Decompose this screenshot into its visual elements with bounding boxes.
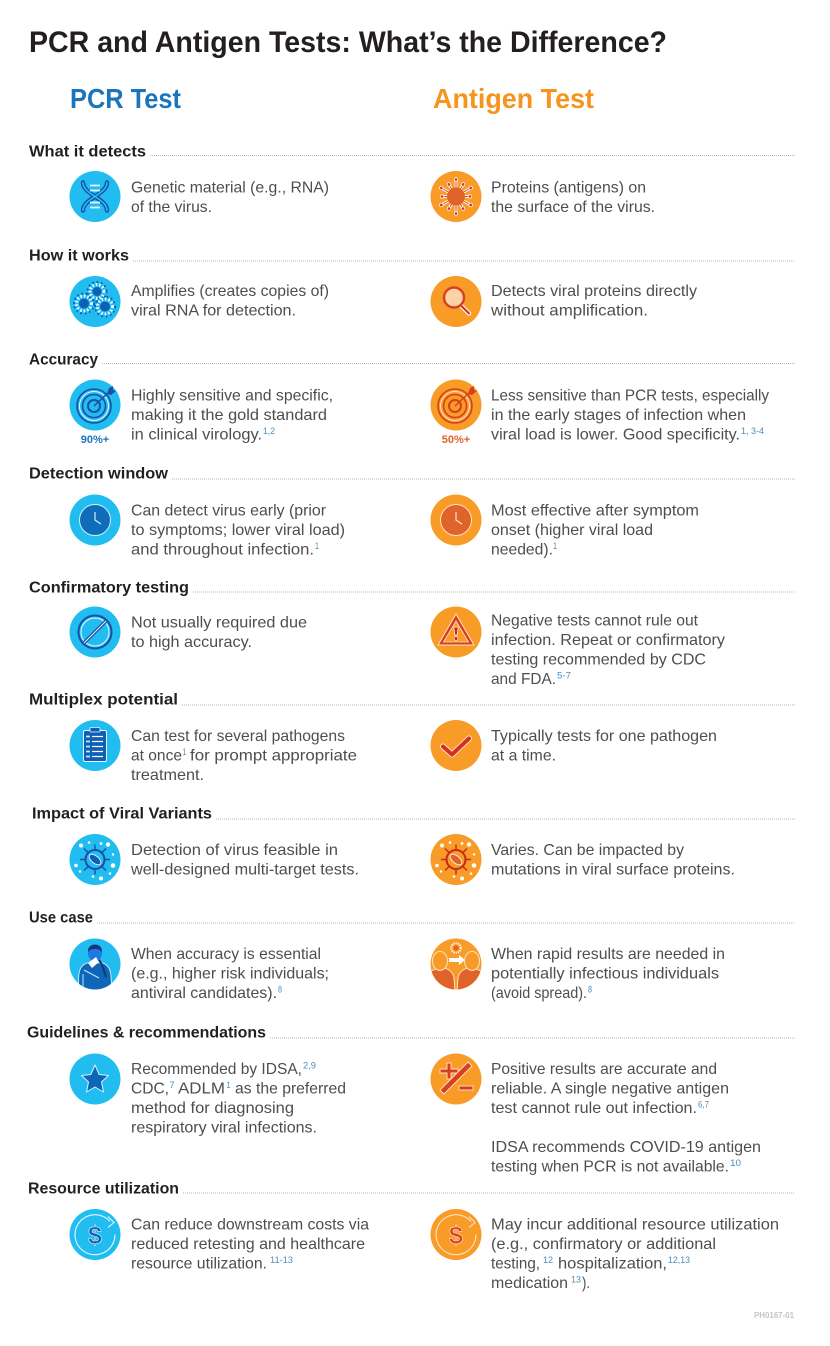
icon: clock	[430, 494, 482, 546]
Antigen cell: accuracy	[430, 380, 769, 446]
text block: IDSA recommends COVID-19 antigen	[491, 1139, 761, 1156]
Antigen cell: guidelines	[430, 1054, 761, 1176]
text block: the surface of the virus.	[491, 199, 655, 216]
PCR cell: what it detects	[70, 171, 329, 222]
icon: clipboard checklist	[70, 720, 120, 771]
text block: 12	[543, 1255, 553, 1265]
title: PCR and Antigen Tests: What’s the Difference?	[29, 26, 667, 59]
text block: 11-13	[270, 1255, 293, 1265]
PCR cell: use case	[70, 938, 329, 1002]
text block	[491, 728, 717, 764]
icon: mutating virus	[430, 834, 482, 885]
text block: (e.g., confirmatory or additional	[491, 1236, 716, 1253]
icon: clock	[70, 494, 120, 546]
text block: in the early stages of infection when	[491, 407, 746, 424]
text block: reduced retesting and healthcare	[131, 1236, 365, 1253]
icon: magnifier	[430, 276, 482, 327]
text block: When accuracy is essential	[131, 946, 321, 963]
section: Multiplex potential: Multiplex potential	[29, 692, 178, 708]
section: Accuracy: Accuracy	[29, 352, 98, 368]
text block	[131, 1216, 369, 1272]
text block: Less sensitive than PCR tests, especially	[491, 388, 769, 404]
text block	[491, 1061, 761, 1176]
text block: needed).	[491, 542, 553, 558]
text block: for prompt appropriate	[190, 748, 357, 764]
text block: Highly sensitive and specific,	[131, 388, 333, 404]
icon: plus minus	[430, 1054, 482, 1104]
text block: Recommended by IDSA,	[131, 1061, 302, 1078]
text block: antiviral candidates).	[131, 985, 277, 1002]
text block: Positive results are accurate and	[491, 1061, 717, 1078]
text block: 1	[226, 1080, 230, 1090]
Antigen cell: detection window	[430, 494, 699, 558]
text block: 6,7	[698, 1100, 709, 1110]
text block: Negative tests cannot rule out	[491, 612, 699, 630]
text block: Most effective after symptom	[491, 502, 699, 520]
text block: at a time.	[491, 748, 556, 764]
text block: 2,9	[303, 1060, 316, 1070]
icon: DNA helix	[70, 171, 120, 222]
section: Guidelines & recommendations: Guidelines & recommendations	[27, 1024, 266, 1042]
text block: Can detect virus early (prior	[131, 502, 327, 520]
text block: and FDA.	[491, 671, 556, 688]
PCR cell: resource utilization	[70, 1209, 369, 1272]
text block: mutations in viral surface proteins.	[491, 862, 735, 878]
text block: 5-7	[557, 670, 571, 680]
icon: prohibited sign	[70, 606, 120, 658]
section: Use case: Use case	[29, 910, 93, 926]
text block: ).	[582, 1275, 590, 1292]
text block: respiratory viral infections.	[131, 1120, 317, 1136]
icon: target 90%+	[70, 380, 120, 446]
text block: treatment.	[131, 767, 204, 784]
text block: to high accuracy.	[131, 634, 252, 651]
text block: testing,	[491, 1256, 540, 1272]
text block	[130, 842, 359, 878]
icon: dollar cycle	[430, 1209, 482, 1260]
text block: testing recommended by CDC	[491, 652, 706, 668]
icon: star	[70, 1054, 120, 1104]
text block: (avoid spread).	[491, 985, 587, 1002]
text block: When rapid results are needed in	[491, 946, 725, 963]
text block: 8	[588, 984, 592, 994]
section: Detection window: Detection window	[29, 466, 169, 482]
text block: ADLM	[178, 1080, 225, 1098]
text block	[131, 283, 329, 320]
text block: (e.g., higher risk individuals;	[131, 966, 329, 982]
section: Confirmatory testing: Confirmatory testing	[29, 580, 189, 596]
text block: method for diagnosing	[131, 1100, 294, 1117]
text block: to symptoms; lower viral load)	[131, 522, 345, 539]
text block: without amplification.	[490, 302, 648, 320]
heading: Antigen Test: Antigen Test	[433, 83, 594, 114]
section: Resource utilization: Resource utilization	[28, 1180, 179, 1198]
text block: of the virus.	[131, 199, 212, 216]
text block: hospitalization,	[558, 1256, 667, 1272]
PCR cell: accuracy	[70, 380, 333, 446]
text block: Detects viral proteins directly	[491, 283, 697, 300]
text block	[491, 388, 769, 444]
text block: resource utilization.	[131, 1256, 267, 1272]
text block: Typically tests for one pathogen	[491, 728, 717, 745]
text block: viral RNA for detection.	[131, 302, 296, 320]
icon: two people with virus spread	[429, 938, 483, 991]
Antigen cell: confirmatory testing	[430, 606, 725, 688]
Antigen cell: how it works	[430, 276, 697, 327]
icon: target 90%+: 90%+	[81, 434, 109, 446]
icon: target 50%+	[430, 380, 482, 446]
text block: Varies. Can be impacted by	[491, 842, 684, 859]
text block: 1	[182, 747, 186, 757]
text block	[131, 388, 333, 444]
icon: dollar cycle	[70, 1209, 120, 1260]
text block	[491, 502, 699, 558]
section: What it detects: What it detects	[29, 144, 146, 160]
text block	[491, 946, 725, 1002]
text block: well-designed multi-target tests.	[130, 862, 359, 878]
text block: 1, 3-4	[741, 426, 764, 436]
text block: Amplifies (creates copies of)	[131, 283, 329, 300]
Antigen cell: resource utilization	[430, 1209, 779, 1292]
text block: 10	[730, 1158, 741, 1168]
text block	[491, 612, 725, 688]
icon: amplified viruses	[70, 276, 120, 327]
Antigen cell: what it detects	[430, 171, 655, 222]
text block	[131, 728, 357, 784]
text block: Not usually required due	[131, 614, 307, 632]
text block: Detection of virus feasible in	[131, 842, 338, 859]
PCR cell: guidelines	[70, 1054, 346, 1136]
text block: testing when PCR is not available.	[491, 1158, 729, 1176]
text block	[131, 946, 329, 1002]
heading: PCR Test: PCR Test	[70, 83, 181, 114]
text block: at once	[131, 748, 182, 764]
text block: 12,13	[668, 1255, 690, 1265]
PCR cell: confirmatory testing	[70, 606, 307, 658]
text block: Can test for several pathogens	[131, 728, 345, 745]
icon: person with swab	[70, 938, 120, 994]
text block	[131, 1060, 346, 1136]
text block: 1	[315, 541, 319, 551]
text block	[131, 614, 307, 651]
text block: medication	[491, 1275, 568, 1292]
text block: infection. Repeat or confirmatory	[491, 632, 725, 649]
text block	[131, 502, 345, 558]
text block: test cannot rule out infection.	[491, 1100, 697, 1117]
text block: viral load is lower. Good specificity.	[491, 426, 740, 444]
text block: CDC,	[131, 1080, 169, 1098]
text block: 1	[553, 541, 557, 551]
section: Impact of Viral Variants: Impact of Viral Variants	[32, 806, 212, 822]
icon: dollar cycle: $	[449, 1222, 463, 1250]
icon: target 50%+: 50%+	[442, 434, 470, 446]
text block: onset (higher viral load	[491, 522, 653, 539]
text block: May incur additional resource utilization	[491, 1216, 779, 1234]
text block: and throughout infection.	[131, 542, 314, 558]
Antigen cell: multiplex potential	[430, 720, 717, 771]
section: How it works: How it works	[29, 248, 129, 264]
text block: 8	[278, 984, 282, 994]
PCR cell: how it works	[70, 276, 329, 327]
text block: reliable. A single negative antigen	[491, 1080, 729, 1098]
text block: 7	[170, 1080, 174, 1090]
text block: 1,2	[263, 426, 275, 436]
text block	[491, 842, 735, 878]
text block	[131, 180, 329, 216]
icon: warning triangle	[430, 606, 482, 658]
PCR cell: multiplex potential	[70, 720, 357, 784]
Antigen cell: viral variants	[430, 834, 735, 885]
text block	[490, 283, 697, 320]
text block: as the preferred	[235, 1080, 346, 1098]
Antigen cell: use case	[429, 938, 725, 1002]
icon: mutating virus	[70, 834, 120, 885]
text block: Can reduce downstream costs via	[131, 1216, 369, 1234]
text block: 13	[571, 1274, 581, 1284]
icon: virus proteins	[430, 171, 482, 222]
text block: potentially infectious individuals	[491, 966, 719, 982]
text block	[491, 180, 655, 216]
PCR cell: detection window	[70, 494, 345, 558]
text block: making it the gold standard	[131, 407, 327, 424]
text block: in clinical virology.	[131, 426, 262, 444]
text block: Proteins (antigens) on	[491, 180, 646, 196]
PCR cell: viral variants	[70, 834, 359, 885]
footer code: PH0167-01	[754, 1311, 795, 1320]
text block	[491, 1216, 779, 1292]
text block: Genetic material (e.g., RNA)	[131, 180, 329, 196]
icon: check mark	[430, 720, 482, 771]
icon: dollar cycle: $	[88, 1222, 102, 1250]
